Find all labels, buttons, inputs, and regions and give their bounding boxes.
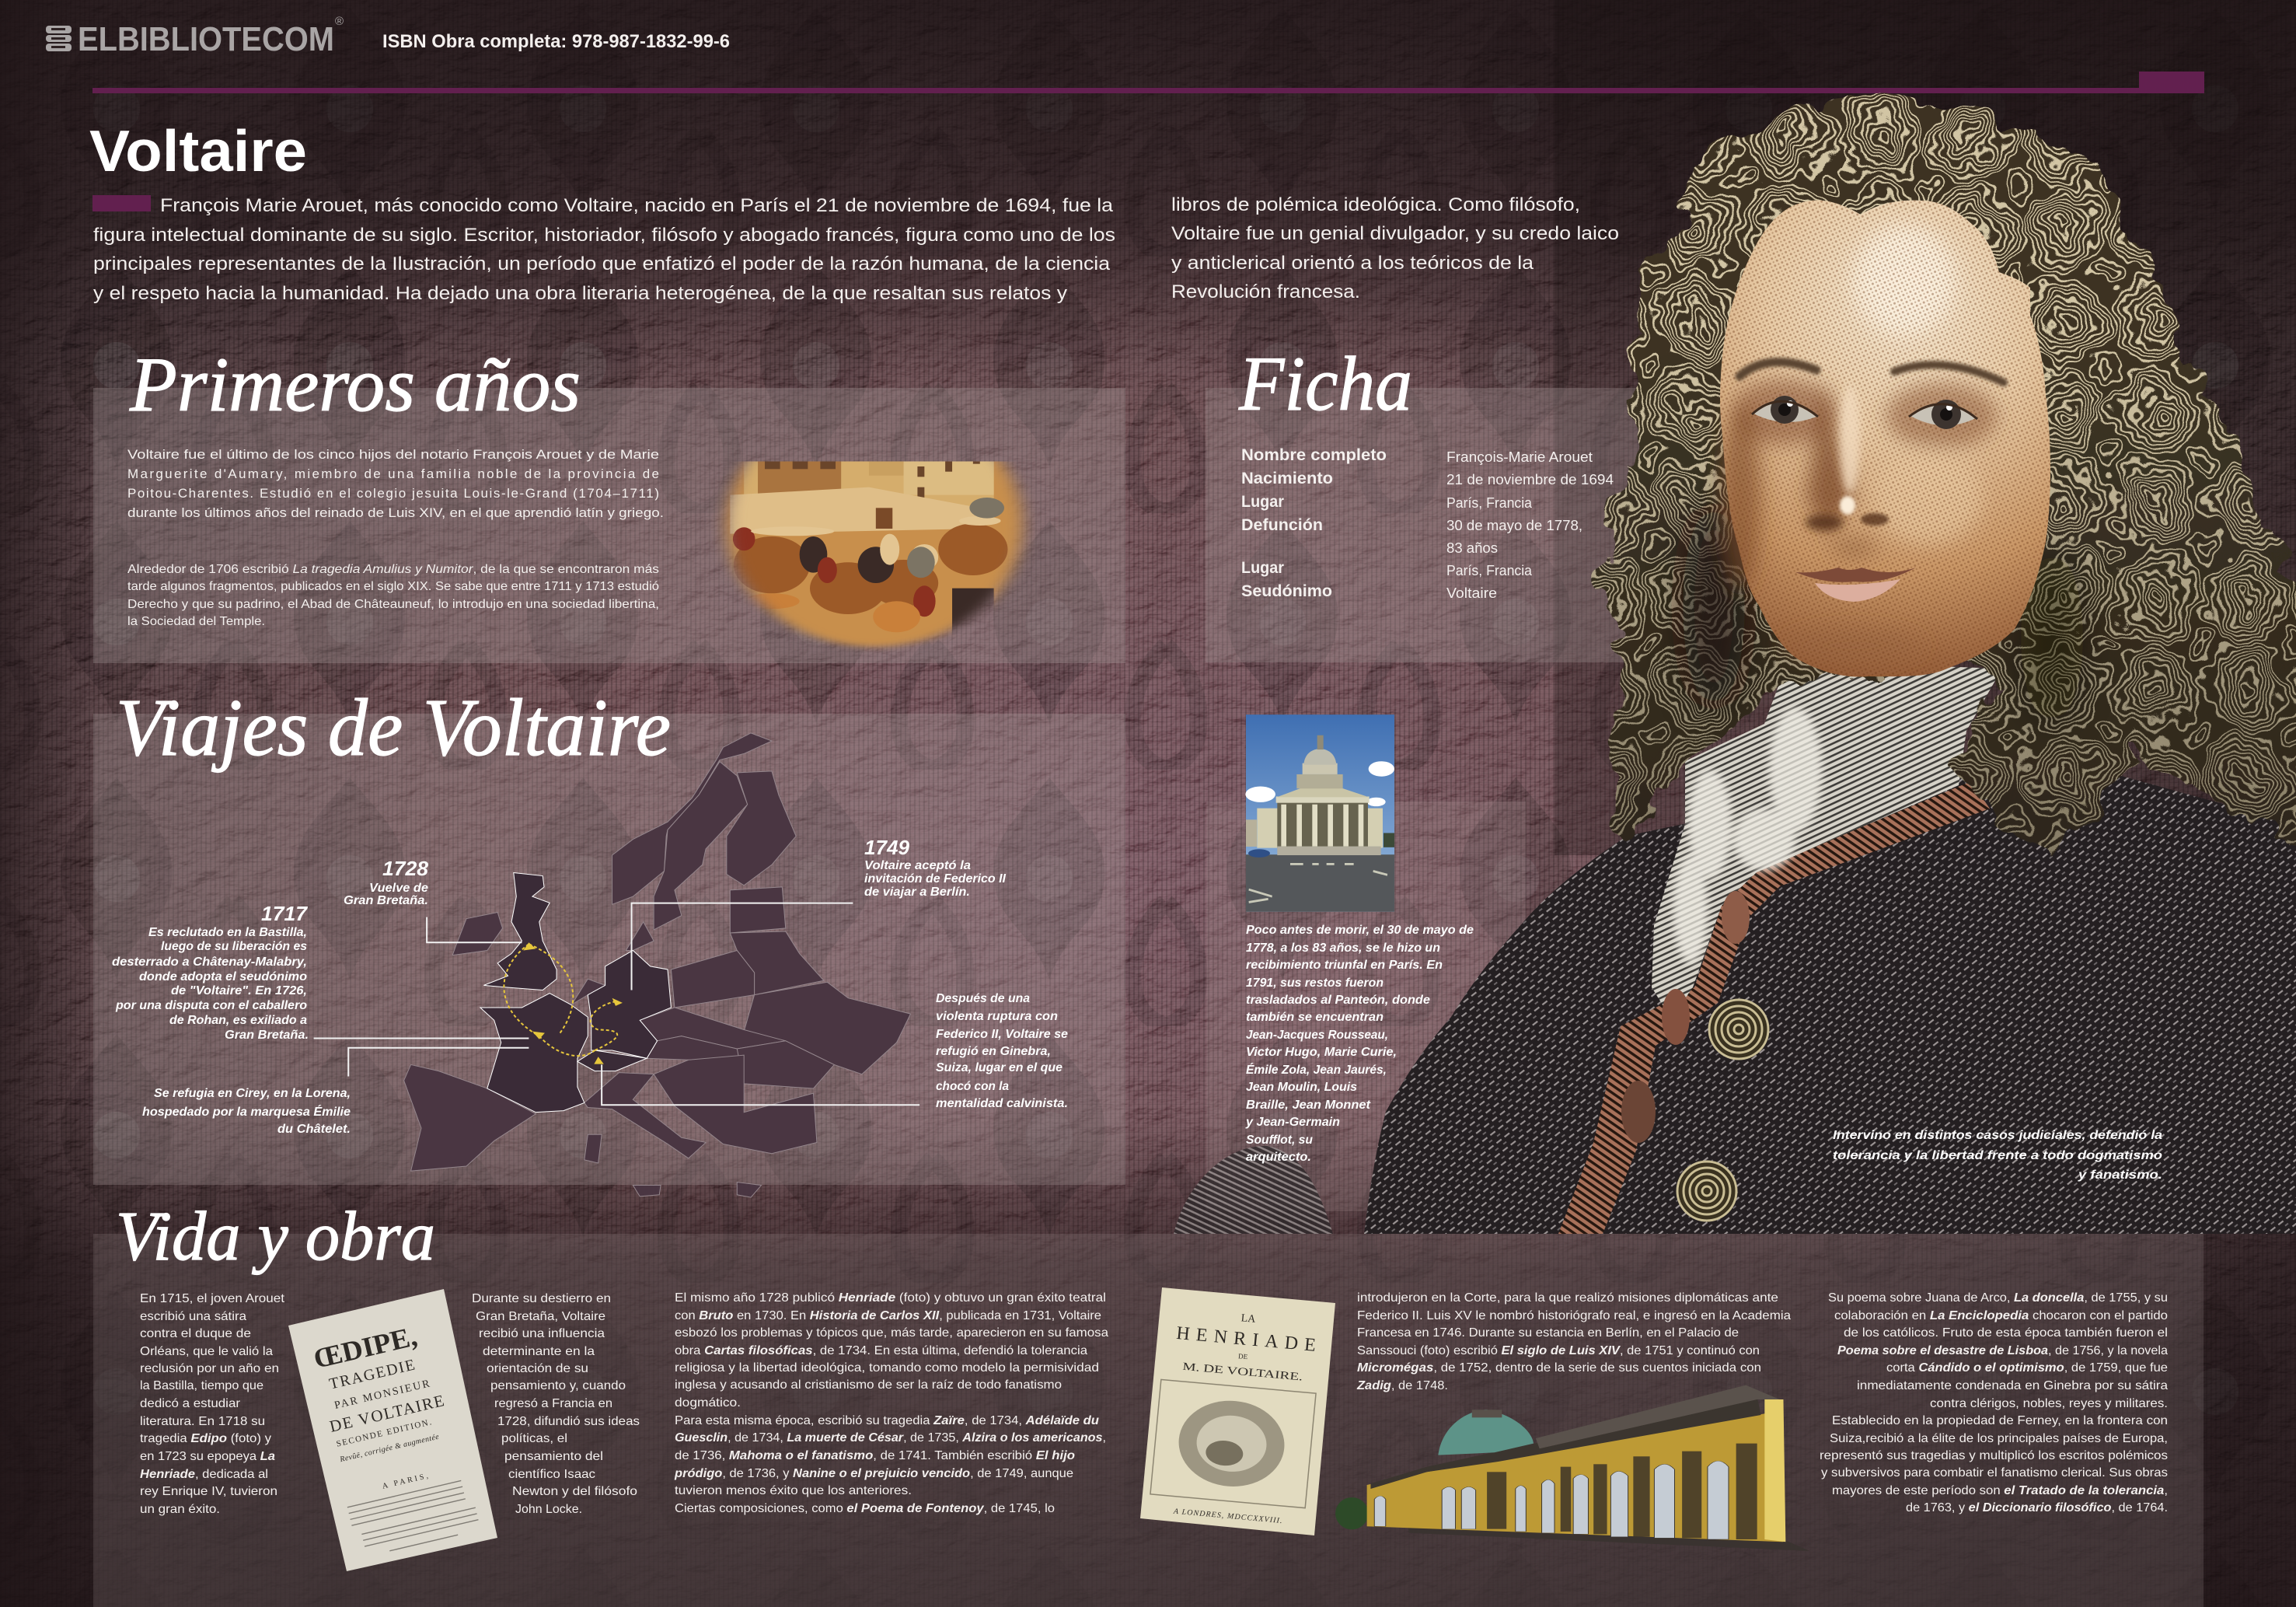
text block: family and schooling: durante los últimos años del reinado de Luis XIV, en el que aprendió latín y griego.: [127, 505, 664, 520]
quote: intervino: tolerancia y la libertad frente a todo dogmatismo: [1833, 1149, 2162, 1162]
callout: 1717: Es reclutado en la Bastilla,: [148, 926, 307, 939]
intro text: François Marie Arouet, más conocido como Voltaire, nacido en París el 21 de noviembre de 1694, fue la: [160, 195, 1114, 216]
column 1: en 1723 su epopeya La: [140, 1450, 275, 1463]
intro text: libros de polémica ideológica. Como filósofo,: [1171, 194, 1580, 215]
fact values: François-Marie Arouet: [1446, 449, 1593, 465]
callout: 1717: Gran Bretaña.: [225, 1029, 309, 1042]
column 5: y subversivos para combatir el fanatismo clerical. Sus obras: [1821, 1466, 2168, 1479]
intro text: [92, 194, 1619, 304]
column 1: [140, 1292, 285, 1516]
column 3: tuvieron menos éxito que los anteriores.: [675, 1484, 912, 1497]
column 4: Sanssouci (foto) escribió El siglo de Luis XIV , de 1751 y continuó con: [1357, 1344, 1760, 1357]
column 5: Establecido en la propiedad de Ferney, en la frontera con: [1832, 1414, 2168, 1427]
image: oedipe title page: TRAGEDIE: [327, 1357, 417, 1393]
column 1: dedicó a estudiar: [140, 1397, 241, 1410]
callout: 1749: de viajar a Berlín.: [864, 886, 970, 899]
text block: 1706: [127, 563, 659, 628]
quote: intervino: [1833, 1129, 2162, 1182]
text block: panteón: 1778, a los 83 años, se le hizo un: [1246, 941, 1440, 955]
callout: 1749: Voltaire aceptó la: [864, 859, 971, 872]
intro text: Voltaire fue un genial divulgador, y su credo laico: [1171, 223, 1619, 244]
callout: ginebra: refugió en Ginebra,: [936, 1045, 1051, 1058]
column 1: rey Enrique IV, tuvieron: [140, 1485, 277, 1498]
callout: 1749: 1749: [864, 836, 910, 859]
callout: 1749: [864, 836, 1007, 899]
column 1: Orléans, que le valió la: [140, 1345, 273, 1358]
title: Voltaire: [89, 118, 307, 183]
logo: elbibliote.com: ®: [335, 15, 344, 28]
column 2: pensamiento del: [504, 1450, 603, 1463]
text block: panteón: Émile Zola, Jean Jaurés,: [1246, 1062, 1387, 1077]
intro text: principales representantes de la Ilustración, un período que enfatizó el poder de la razón humana, de la ciencia: [93, 253, 1111, 274]
column 3: obra Cartas filosóficas , de 1734. En esta última, defendió la tolerancia: [675, 1344, 1087, 1357]
column 2: recibió una influencia: [479, 1327, 605, 1340]
text block: panteón: Victor Hugo, Marie Curie,: [1246, 1046, 1397, 1059]
column 2: orientación de su: [487, 1362, 588, 1375]
text block: 1706: la Sociedad del Temple.: [127, 615, 265, 628]
text block: family and schooling: Marguerite d'Aumary, miembro de una familia noble de la provincia de: [127, 466, 659, 481]
column 1: escribió una sátira: [140, 1310, 246, 1323]
fact labels: Seudónimo: [1241, 582, 1332, 600]
fact labels: [1241, 446, 1387, 600]
text block: family and schooling: Poitou-Charentes. Estudió en el colegio jesuita Louis-le-Grand (1704–1711): [127, 486, 659, 501]
column 5: inmediatamente condenada en Ginebra por su sátira: [1857, 1379, 2168, 1392]
fact labels: Nombre completo: [1241, 446, 1387, 464]
fact values: [1446, 449, 1614, 601]
intro text: y el respeto hacia la humanidad. Ha dejado una obra literaria heterogénea, de la que resaltan sus relatos y: [93, 283, 1067, 304]
intro text: y anticlerical orientó a los teóricos de la: [1171, 253, 1534, 274]
column 2: Durante su destierro en: [472, 1292, 611, 1305]
facial shading: [1721, 225, 1998, 662]
image: oedipe title page: [288, 1289, 497, 1571]
text block: panteón: Jean-Jacques Rousseau,: [1246, 1029, 1388, 1042]
image: oedipe title page: Revûë, corrigée & augmentée: [338, 1433, 440, 1464]
column 4: introdujeron en la Corte, para la que realizó misiones diplomáticas ante: [1357, 1291, 1778, 1305]
callout: 1728: 1728: [382, 857, 429, 880]
image: la henriade title page: DE: [1238, 1352, 1248, 1361]
quote: intervino: Intervino en distintos casos judiciales, defendió la: [1833, 1129, 2162, 1142]
fact labels: Nacimiento: [1241, 470, 1333, 487]
text block: panteón: y Jean-Germain: [1245, 1116, 1340, 1129]
text block: panteón: Soufflot, su: [1246, 1134, 1313, 1147]
fact values: 83 años: [1446, 540, 1498, 556]
column 5: de los católicos. Fruto de esta época también fueron el: [1844, 1326, 2168, 1340]
buttons: [1621, 891, 1768, 1221]
fact labels: Lugar: [1241, 559, 1284, 577]
image: la henriade title page: A LONDRES, MDCCXXVIII.: [1172, 1507, 1282, 1525]
callout: 1717: por una disputa con el caballero: [115, 999, 307, 1012]
column 3: de 1736, Mahoma o el fanatismo , de 1741. También escribió El hijo: [675, 1449, 1075, 1462]
column 3: esbozó los problemas y tópicos que, más tarde, aparecieron en su famosa: [675, 1326, 1108, 1340]
callout: 1717: de "Voltaire". En 1726,: [171, 984, 307, 997]
map: europe: [314, 733, 919, 1197]
callout: 1728: Vuelve de: [369, 882, 428, 895]
column 3: El mismo año 1728 publicó Henriade (foto) y obtuvo un gran éxito teatral: [675, 1291, 1106, 1305]
quote: intervino: y fanatismo.: [2078, 1169, 2162, 1182]
image: oedipe title page: PAR MONSIEUR: [333, 1378, 431, 1412]
callout: 1717: 1717: [261, 902, 309, 925]
column 4: Zadig, de 1748.: [1356, 1379, 1448, 1392]
text block: panteón: [1245, 924, 1474, 1164]
column 5: de 1763, y el Diccionario filosófico, de 1764.: [1906, 1501, 2168, 1514]
panel: ficha: [1206, 341, 1649, 662]
text block: family and schooling: Voltaire fue el último de los cinco hijos del notario François Arouet y de Marie: [127, 447, 659, 462]
callout: ginebra: violenta ruptura con: [936, 1010, 1058, 1023]
callout leader lines: [314, 903, 919, 1105]
panel: panteón background: [1206, 802, 1526, 1211]
column 4: Federico II. Luis XV le nombró historiógrafo real, e ingresó en la Academia: [1357, 1309, 1791, 1322]
image: la henriade title page: LA: [1240, 1312, 1257, 1326]
column 5: contra clérigos, nobles, reyes y militares.: [1930, 1397, 2168, 1410]
fact values: 21 de noviembre de 1694: [1446, 472, 1614, 487]
callout: 1749: invitación de Federico II: [864, 872, 1007, 886]
wig shadows near the face: [1683, 505, 2083, 723]
callout: 1717: [112, 902, 309, 1042]
callout: 1728: [344, 857, 429, 907]
coat: [1364, 770, 2296, 1234]
column 5: mayores de este período son el Tratado de la tolerancia ,: [1832, 1484, 2168, 1497]
column 2: Gran Bretaña, Voltaire: [476, 1310, 605, 1323]
text block: panteón: Jean Moulin, Louis: [1246, 1081, 1357, 1094]
column 3: inglesa y acusando al cristianismo de ser la raíz de todo fanatismo: [675, 1378, 1062, 1392]
panel: primeros años: [93, 341, 1125, 663]
eyebrows: [1739, 362, 2004, 383]
heading: viajes de voltaire: Viajes de Voltaire: [116, 682, 671, 773]
column 4: [1356, 1291, 1791, 1392]
sleeve: [1174, 1146, 1333, 1234]
column 2: científico Isaac: [508, 1468, 595, 1481]
column 5: corta Cándido o el optimismo , de 1759, que fue: [1886, 1361, 2168, 1375]
column 3: religiosa y la libertad ideológica, tomando como modelo la permisividad: [675, 1361, 1099, 1375]
text block: 1706: Alrededor de 1706 escribió La tragedia Amulius y Numitor , de la que se encontraron más: [127, 563, 659, 576]
callout: 1717: de Rohan, es exiliado a: [169, 1014, 307, 1027]
intro text: Revolución francesa.: [1171, 281, 1360, 302]
column 4: Francesa en 1746. Durante su estancia en Berlín, en el Palacio de: [1357, 1326, 1739, 1340]
image: oedipe title page: ŒDIPE,: [310, 1320, 420, 1375]
image: la henriade title page: HENRIADE: [1175, 1323, 1317, 1356]
heading: vida y obra: Vida y obra: [116, 1198, 435, 1275]
column 2: John Locke.: [515, 1503, 582, 1516]
callout: ginebra: Después de una: [936, 992, 1030, 1005]
column 5: representó sus tragedias y multiplicó los escritos polémicos: [1820, 1449, 2168, 1462]
image: oedipe title page: A PARIS,: [382, 1472, 429, 1491]
callout: 1728: Gran Bretaña.: [344, 894, 428, 907]
wig: [1603, 102, 2296, 871]
fact labels: Lugar: [1241, 493, 1284, 511]
callout: ginebra: Federico II, Voltaire se: [936, 1028, 1068, 1041]
column 5: [1820, 1291, 2168, 1514]
fact values: París, Francia: [1446, 563, 1533, 578]
header rule with tab: [92, 72, 2204, 93]
face: [1720, 201, 2050, 676]
callout: cirey: Se refugia en Cirey, en la Lorena,: [154, 1087, 351, 1100]
column 3: pródigo, de 1736, y Nanine o el prejuicio vencido , de 1749, aunque: [674, 1467, 1073, 1480]
panel: viajes de voltaire: [93, 682, 1125, 1197]
column 1: literatura. En 1718 su: [140, 1415, 265, 1428]
column 5: colaboración en La Enciclopedia chocaron con el partido: [1834, 1309, 2168, 1322]
intro text: figura intelectual dominante de su siglo. Escritor, historiador, filósofo y abogado francés, figura como uno de los: [93, 225, 1115, 246]
callout: ginebra: chocó con la: [936, 1080, 1009, 1093]
nose: [1806, 385, 1889, 530]
callout: ginebra: mentalidad calvinista.: [936, 1097, 1068, 1110]
callout: 1717: luego de su liberación es: [161, 940, 307, 953]
callout: cirey: du Châtelet.: [277, 1123, 351, 1136]
column 1: la Bastilla, tiempo que: [140, 1379, 263, 1392]
column 2: Newton y del filósofo: [512, 1485, 637, 1498]
text block: panteón: Braille, Jean Monnet: [1246, 1099, 1371, 1112]
column 1: Henriade, dedicada al: [140, 1468, 268, 1481]
column 1: tragedia Edipo (foto) y: [140, 1432, 271, 1445]
column 2: determinante en la: [483, 1345, 595, 1358]
column 3: dogmático.: [675, 1396, 741, 1410]
column 1: contra el duque de: [140, 1327, 251, 1340]
column 3: Ciertas composiciones, como el Poema de Fontenoy , de 1745, lo: [675, 1502, 1055, 1515]
heading: ficha: Ficha: [1238, 341, 1412, 427]
column 1: En 1715, el joven Arouet: [140, 1292, 285, 1305]
column 4: Micromégas , de 1752, dentro de la serie de sus cuentos iniciada con: [1357, 1361, 1761, 1375]
photo: panteón de parís: [1245, 714, 1394, 912]
callout: 1717: desterrado a Châtenay-Malabry,: [112, 955, 307, 969]
text block: family and schooling: [127, 447, 664, 520]
column 5: Poema sobre el desastre de Lisboa, de 1756, y la novela: [1837, 1344, 2168, 1357]
column 5: Suiza,recibió a la élite de los principales países de Europa,: [1830, 1432, 2168, 1445]
image: medieval city illumination: [717, 462, 1032, 650]
fact values: 30 de mayo de 1778,: [1446, 518, 1582, 533]
column 2: políticas, el: [501, 1432, 567, 1445]
column 2: regresó a Francia en: [494, 1397, 612, 1410]
text block: panteón: arquitecto.: [1246, 1151, 1311, 1164]
text block: panteón: recibimiento triunfal en París. En: [1246, 959, 1443, 972]
text block: 1706: Derecho y que su padrino, el Abad de Châteauneuf, lo introdujo en una sociedad libertina,: [127, 598, 659, 611]
isbn: ISBN Obra completa: 978-987-1832-99-6: [382, 31, 730, 52]
mouth: [1795, 568, 1916, 602]
column 3: Para esta misma época, escribió su tragedia Zaïre, de 1734, Adélaïde du: [675, 1414, 1099, 1427]
callout: ginebra: Suiza, lugar en el que: [936, 1061, 1063, 1074]
text block: 1706: tarde algunos fragmentos, publicados en el siglo XIX. Se sabe que entre 1711 y 1713 estudió: [127, 580, 659, 593]
collar and cravat: [1652, 661, 2002, 1018]
panteón block: [1245, 714, 1474, 1164]
fact values: Voltaire: [1446, 585, 1497, 601]
fact labels: Defunción: [1241, 516, 1323, 534]
text block: panteón: Poco antes de morir, el 30 de mayo de: [1246, 924, 1474, 937]
column 1: un gran éxito.: [140, 1503, 220, 1516]
icon: book stack: [46, 26, 72, 51]
callout: cirey: [142, 1087, 351, 1136]
image: sanssouci palace: [1335, 1385, 1809, 1551]
portrait: voltaire: [1174, 102, 2296, 1234]
column 1: reclusión por un año en: [140, 1362, 279, 1375]
image: la henriade title page: M. DE VOLTAIRE.: [1182, 1361, 1303, 1384]
callout: 1717: donde adopta el seudónimo: [139, 970, 307, 983]
panel: vida y obra: [93, 1198, 2204, 1607]
text block: panteón: trasladados al Panteón, donde: [1246, 994, 1430, 1007]
callout: cirey: hospedado por la marquesa Émilie: [142, 1104, 351, 1119]
column 3: con Bruto en 1730. En Historia de Carlos XII , publicada en 1731, Voltaire: [675, 1309, 1101, 1322]
column 2: pensamiento y, cuando: [490, 1379, 626, 1392]
text block: panteón: 1791, sus restos fueron: [1246, 976, 1384, 990]
callout: ginebra: [936, 992, 1068, 1110]
column 3: [674, 1291, 1108, 1515]
column 5: Su poema sobre Juana de Arco, La doncella, de 1755, y su: [1828, 1291, 2168, 1305]
column 2: [472, 1292, 640, 1516]
coat lining: [1558, 781, 1990, 1234]
fact values: París, Francia: [1446, 495, 1533, 511]
image: la henriade title page: [1140, 1287, 1335, 1535]
text block: panteón: también se encuentran: [1246, 1011, 1384, 1024]
image: oedipe title page: SECONDE EDITION.: [336, 1417, 433, 1449]
logo: elbibliote.com: ELBIBLIOTECOM: [78, 20, 334, 58]
travel routes: [504, 944, 618, 1056]
column 2: 1728, difundió sus ideas: [497, 1415, 640, 1428]
image: oedipe title page: DE VOLTAIRE: [328, 1391, 446, 1436]
eyes: [1752, 396, 1977, 429]
heading: primeros años: Primeros años: [129, 341, 581, 428]
column 3: Guesclin, de 1734, La muerte de César, de 1735, Alzira o los americanos,: [675, 1431, 1106, 1445]
